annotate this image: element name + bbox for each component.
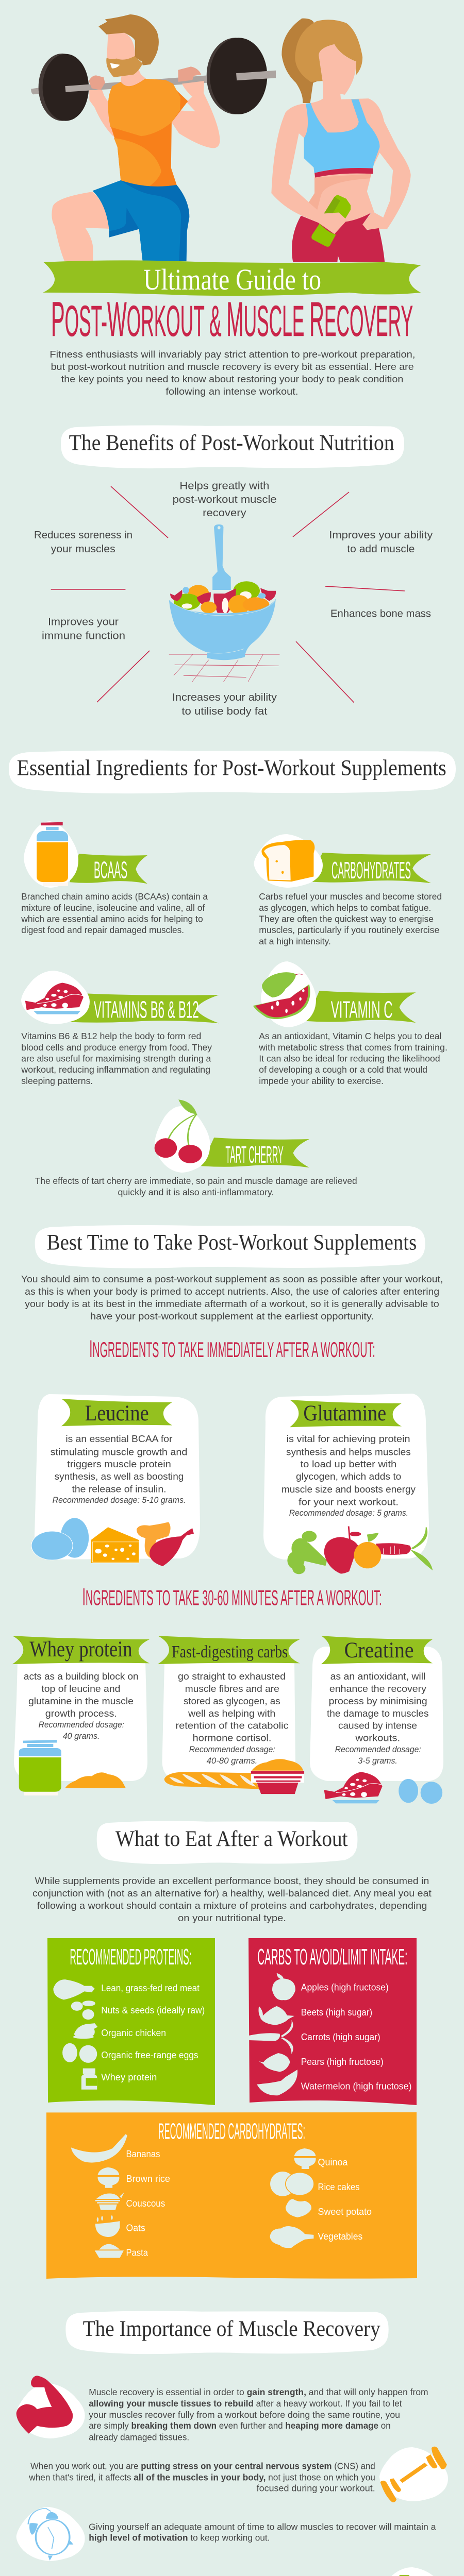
panel: fast-digesting carbs: retention of the catabolic bbox=[175, 1720, 289, 1731]
text: best time paragraph: have your post-workout supplement at the earliest opportunity. bbox=[90, 1311, 374, 1321]
panel: creatine: as an antioxidant, will bbox=[330, 1671, 425, 1682]
icon: cherries bbox=[155, 1099, 202, 1163]
panel: whey protein: 40 grams. bbox=[63, 1732, 100, 1741]
ingredient: vitamins B6 and B12: VITAMINS B6 & B12 bbox=[94, 996, 199, 1023]
panel: fast-digesting carbs: hormone cortisol. bbox=[193, 1733, 271, 1743]
panel: recommended carbohydrates: Quinoa bbox=[318, 2157, 348, 2167]
heading: benefits bbox=[61, 425, 404, 468]
text: vitamin C bbox=[258, 1031, 448, 1086]
text: carbohydrates: Carbs refuel your muscles and become stored bbox=[259, 891, 442, 902]
icon: alarm clock bbox=[28, 2509, 73, 2561]
panel: whey protein bbox=[12, 1636, 150, 1795]
item: motivation bbox=[16, 2507, 436, 2561]
text: what to eat paragraph: While supplements provide an excellent performance boost, they should be consumed in bbox=[35, 1875, 429, 1886]
text: carbohydrates: They are often the quickest way to energise bbox=[259, 913, 434, 924]
text: vitamin C: of developing a cough or a cold that would bbox=[259, 1064, 427, 1075]
item: central nervous system: focused during your workout. bbox=[257, 2483, 375, 2494]
panel: leucine: Recommended dosage: 5-10 grams. bbox=[53, 1496, 186, 1505]
item: gain strength: already damaged tissues. bbox=[89, 2432, 189, 2442]
text: vitamins B6 and B12: are also useful for maximising strength during a bbox=[21, 1053, 211, 1063]
panel: fast-digesting carbs bbox=[158, 1636, 304, 1794]
text: what to eat paragraph: conjunction with (not as an alternative for) a healthy, well-balanced diet. Any meal you eat bbox=[32, 1888, 432, 1899]
icons: protein foods bbox=[53, 1979, 97, 2090]
ingredient: BCAAs: BCAAS bbox=[94, 856, 127, 883]
ingredient: tart cherry bbox=[155, 1099, 309, 1173]
panel: leucine: stimulating muscle growth and bbox=[51, 1447, 187, 1457]
text: tart cherry bbox=[35, 1176, 357, 1197]
panel: fast-digesting carbs: stored as glycogen, as bbox=[184, 1696, 280, 1706]
panel: recommended carbohydrates: Oats bbox=[126, 2223, 145, 2233]
panel: fast-digesting carbs: muscle fibres and are bbox=[185, 1684, 279, 1694]
icon: fish on a plate bbox=[25, 982, 84, 1014]
panel: creatine: process by minimising bbox=[329, 1696, 427, 1706]
text: vitamins B6 and B12: workout, reducing inflammation and regulating bbox=[21, 1064, 210, 1075]
icon: bread loaf bbox=[261, 840, 314, 882]
intro text bbox=[49, 349, 415, 397]
panel: leucine: Leucine bbox=[85, 1401, 149, 1426]
panel: whey protein: growth process. bbox=[45, 1708, 117, 1719]
text: vitamin C: It can also be ideal for reducing the likelihood bbox=[259, 1053, 440, 1063]
figure: woman with shaker bottle bbox=[271, 19, 411, 262]
icon: dumbbell bbox=[380, 2447, 447, 2502]
icons: fruit and vegetables to limit bbox=[248, 1973, 297, 2095]
item: gain strength: are simply breaking them down even further and heaping more damage on bbox=[89, 2420, 391, 2431]
icon: broccoli, apple, orange, carrot bbox=[287, 1526, 432, 1574]
text: tart cherry: The effects of tart cherry are immediate, so pain and muscle damage are relieved bbox=[35, 1176, 357, 1186]
text: what to eat paragraph bbox=[32, 1875, 432, 1923]
panel: whey protein: Whey protein bbox=[29, 1637, 132, 1662]
text: BCAAs: Branched chain amino acids (BCAAs) contain a bbox=[21, 891, 208, 902]
panel: recommended carbohydrates: Vegetables bbox=[318, 2231, 362, 2242]
item: central nervous system: When you work out, you are putting stress on your central nervous system (CNS) and bbox=[30, 2461, 375, 2471]
heading: benefits: The Benefits of Post-Workout Nutrition bbox=[69, 431, 394, 455]
panel: creatine: workouts. bbox=[355, 1733, 400, 1743]
icon: fruit bowl with fork on a checked cloth bbox=[169, 524, 279, 682]
text: vitamins B6 and B12 bbox=[21, 1031, 212, 1086]
benefit: immune: Improves your bbox=[48, 617, 119, 628]
text: what to eat paragraph: following a workout should contain a mixture of proteins and carbohydrates, depending bbox=[37, 1900, 427, 1911]
benefit: muscle recovery: Helps greatly with bbox=[179, 480, 269, 492]
title line 1: Ultimate Guide to bbox=[143, 263, 321, 296]
panel: glutamine: muscle size and boosts energy bbox=[281, 1484, 416, 1495]
text: best time paragraph: You should aim to consume a post-workout supplement as soon as possible after your workout, bbox=[21, 1274, 443, 1284]
panel: glutamine: glycogen, which adds to bbox=[296, 1471, 401, 1482]
text: best time paragraph: your body is at its best in the immediate aftermath of a workout, so it is generally advisable to bbox=[25, 1298, 439, 1309]
text: tart cherry: quickly and it is also anti-inflammatory. bbox=[118, 1187, 274, 1197]
panel: recommended proteins: Organic chicken bbox=[101, 2028, 166, 2038]
icons: carbohydrate foods bbox=[71, 2134, 316, 2258]
panel: creatine bbox=[310, 1636, 443, 1804]
text: BCAAs: which are essential amino acids for helping to bbox=[21, 913, 203, 924]
hero illustration: man lifting barbell and woman with shaker bbox=[31, 14, 421, 296]
panel: fast-digesting carbs: 40-80 grams. bbox=[207, 1756, 257, 1766]
panel: leucine: is an essential BCAA for bbox=[65, 1434, 172, 1444]
panel: fast-digesting carbs: Fast-digesting carbs bbox=[172, 1642, 288, 1662]
panel: creatine: Creatine bbox=[344, 1638, 414, 1663]
panel: recommended proteins: Whey protein bbox=[101, 2072, 157, 2082]
panel: whey protein: Recommended dosage: bbox=[39, 1720, 124, 1730]
panel: recommended carbohydrates: Brown rice bbox=[126, 2174, 170, 2184]
heading: importance of muscle recovery bbox=[65, 2311, 389, 2354]
text: carbohydrates: muscles, particularly if you routinely exercise bbox=[259, 925, 439, 935]
text: BCAAs: digest food and repair damaged muscles. bbox=[21, 925, 184, 935]
panel: recommended proteins bbox=[47, 1938, 215, 2105]
heading: best time: Best Time to Take Post-Workout Supplements bbox=[47, 1231, 417, 1255]
benefit: add muscle: Improves your ability bbox=[329, 530, 433, 541]
text: vitamins B6 and B12: blood cells and produce energy from food. They bbox=[21, 1042, 212, 1053]
panel: fast-digesting carbs: well as helping with bbox=[188, 1708, 275, 1719]
benefit: soreness: Reduces soreness in bbox=[34, 530, 132, 541]
benefit: muscle recovery: recovery bbox=[203, 507, 246, 519]
benefit: body fat bbox=[172, 692, 277, 717]
panel: glutamine: Glutamine bbox=[303, 1401, 386, 1426]
text: vitamin C: As an antioxidant, Vitamin C helps you to deal bbox=[259, 1031, 441, 1041]
heading: what to eat bbox=[97, 1821, 357, 1864]
heading: importance of muscle recovery: The Importance of Muscle Recovery bbox=[83, 2317, 380, 2341]
item: gain strength: your muscles recover fully from a workout before doing the same routine, you bbox=[89, 2410, 400, 2420]
icon: baguette and bowl of rice bbox=[164, 1759, 304, 1794]
text: carbohydrates bbox=[259, 891, 442, 946]
panel: leucine: the release of insulin. bbox=[72, 1484, 166, 1494]
panel: glutamine: is vital for achieving protein bbox=[287, 1434, 410, 1444]
ingredient: carbohydrates bbox=[254, 834, 431, 888]
icon: flexed arm bbox=[16, 2376, 73, 2434]
ingredient: tart cherry: TART CHERRY bbox=[225, 1141, 284, 1168]
text: vitamins B6 and B12: sleeping patterns. bbox=[21, 1076, 93, 1086]
item: motivation: Giving yourself an adequate amount of time to allow muscles to recover will maintain a bbox=[89, 2521, 436, 2532]
panel: recommended carbohydrates: Pasta bbox=[126, 2248, 148, 2258]
benefit: add muscle bbox=[329, 530, 433, 555]
intro text: the key points you need to know about restoring your body to peak condition bbox=[61, 374, 403, 384]
panel: leucine: synthesis, as well as boosting bbox=[55, 1471, 184, 1482]
panel: creatine: enhance the recovery bbox=[329, 1684, 426, 1694]
figure: man with barbell bbox=[31, 14, 276, 261]
panel: glutamine bbox=[263, 1394, 432, 1574]
panel: whey protein: acts as a building block on bbox=[24, 1671, 139, 1682]
panel: recommended carbohydrates: Rice cakes bbox=[318, 2182, 360, 2192]
item: gain strength: allowing your muscle tissues to rebuild after a heavy workout. If you fail to let bbox=[89, 2398, 402, 2409]
heading: best time bbox=[35, 1225, 425, 1268]
panel: carbs to avoid: Pears (high fructose) bbox=[301, 2057, 384, 2067]
text: what to eat paragraph: on your nutritional type. bbox=[178, 1912, 286, 1923]
item: gain strength: Muscle recovery is essential in order to gain strength, and that will only happen from bbox=[89, 2387, 428, 2397]
panel: carbs to avoid bbox=[248, 1938, 417, 2105]
panel: recommended proteins: Nuts & seeds (ideally raw) bbox=[101, 2005, 205, 2015]
panel: carbs to avoid: Beets (high sugar) bbox=[301, 2007, 372, 2018]
panel: glutamine: to load up better with bbox=[301, 1459, 396, 1469]
benefit: soreness: your muscles bbox=[51, 544, 115, 555]
panel: leucine: triggers muscle protein bbox=[67, 1459, 171, 1469]
panel: creatine: caused by intense bbox=[338, 1720, 417, 1731]
text: vitamin C: with metabolic stress that comes from training. bbox=[258, 1042, 448, 1053]
benefit: bone mass: Enhances bone mass bbox=[330, 608, 431, 619]
panel: recommended carbohydrates bbox=[46, 2112, 417, 2279]
panel: recommended proteins: Organic free-range eggs bbox=[101, 2050, 198, 2060]
benefit: immune bbox=[42, 617, 125, 641]
panel: creatine: Recommended dosage: bbox=[335, 1745, 421, 1754]
icon: pear and watermelon bbox=[253, 972, 310, 1019]
heading: essential ingredients bbox=[9, 750, 456, 793]
panel: glutamine: Recommended dosage: 5 grams. bbox=[289, 1509, 408, 1518]
panel: whey protein: glutamine in the muscle bbox=[28, 1696, 134, 1706]
intro text: Fitness enthusiasts will invariably pay strict attention to pre-workout preparation, bbox=[49, 349, 415, 360]
panel: glutamine: for your next workout. bbox=[299, 1497, 399, 1507]
text: best time paragraph bbox=[21, 1274, 443, 1321]
benefit: body fat: Increases your ability bbox=[172, 692, 277, 703]
item: central nervous system: when that's tired, it affects all of the muscles in your body, not just those on which you bbox=[28, 2472, 375, 2483]
text: carbohydrates: as glycogen, which helps to combat fatigue. bbox=[259, 903, 431, 913]
heading: what to eat: What to Eat After a Workout bbox=[115, 1827, 348, 1851]
panel: recommended carbohydrates: Bananas bbox=[126, 2149, 160, 2159]
panel: glutamine: synthesis and helps muscles bbox=[286, 1447, 411, 1457]
panel: whey protein: top of leucine and bbox=[41, 1684, 120, 1694]
panel: carbs to avoid: Watermelon (high fructose) bbox=[301, 2081, 411, 2092]
icon: fish and eggs bbox=[324, 1772, 442, 1804]
text: BCAAs bbox=[21, 891, 208, 935]
benefit: body fat: to utilise body fat bbox=[181, 706, 268, 717]
panel: leucine bbox=[31, 1394, 200, 1566]
ingredient: vitamin C: VITAMIN C bbox=[331, 996, 393, 1023]
panel: fast-digesting carbs: go straight to exhausted bbox=[178, 1671, 286, 1682]
icon: eggs, cheese, mushroom, drumstick bbox=[31, 1518, 194, 1566]
benefit: soreness bbox=[34, 530, 132, 555]
item: central nervous system bbox=[28, 2447, 448, 2502]
icon: green supplement jar and grain heap bbox=[19, 1740, 126, 1795]
text: BCAAs: mixture of leucine, isoleucine and valine, all of bbox=[21, 903, 205, 913]
text: carbohydrates: at a high intensity. bbox=[259, 936, 331, 946]
panel: recommended carbohydrates: Couscous bbox=[126, 2198, 165, 2209]
text: vitamins B6 and B12: Vitamins B6 & B12 help the body to form red bbox=[21, 1031, 201, 1041]
ingredient: vitamin C bbox=[253, 961, 416, 1027]
benefit: muscle recovery: post-workout muscle bbox=[173, 494, 277, 505]
benefit: muscle recovery bbox=[173, 480, 277, 519]
item: gain strength bbox=[16, 2376, 428, 2442]
item: motivation: high level of motivation to keep working out. bbox=[89, 2532, 270, 2543]
item: injury bbox=[39, 2567, 448, 2576]
text: vitamin C: impede your ability to exercise. bbox=[259, 1076, 384, 1086]
panel: carbs to avoid: Carrots (high sugar) bbox=[301, 2032, 380, 2042]
panel: recommended carbohydrates: Sweet potato bbox=[318, 2207, 372, 2217]
benefit: add muscle: to add muscle bbox=[347, 544, 415, 555]
icon: supplement bottle bbox=[37, 822, 68, 886]
icon: figure with a barbell bbox=[383, 2575, 448, 2576]
benefit: immune: immune function bbox=[42, 630, 125, 641]
panel: carbs to avoid: Apples (high fructose) bbox=[301, 1982, 389, 1993]
intro text: following an intense workout. bbox=[165, 386, 298, 397]
panel: creatine: the damage to muscles bbox=[327, 1708, 429, 1719]
intro text: but post-workout nutrition and muscle recovery is every bit as essential. Here are bbox=[51, 361, 414, 372]
panel: recommended proteins: Lean, grass-fed red meat bbox=[101, 1983, 200, 1993]
text: RECOMMENDED PROTEINS: bbox=[70, 1944, 192, 1970]
text: best time paragraph: as this is when your body is primed to accept nutrients. Also, the use of calories after entering bbox=[25, 1286, 439, 1297]
panel: creatine: 3-5 grams. bbox=[358, 1756, 397, 1766]
panel: fast-digesting carbs: Recommended dosage: bbox=[189, 1745, 275, 1754]
ingredient: vitamins B6 and B12 bbox=[21, 971, 219, 1024]
ingredient: BCAAs bbox=[24, 821, 147, 888]
benefits diagram bbox=[34, 480, 433, 717]
title banner bbox=[43, 260, 421, 296]
